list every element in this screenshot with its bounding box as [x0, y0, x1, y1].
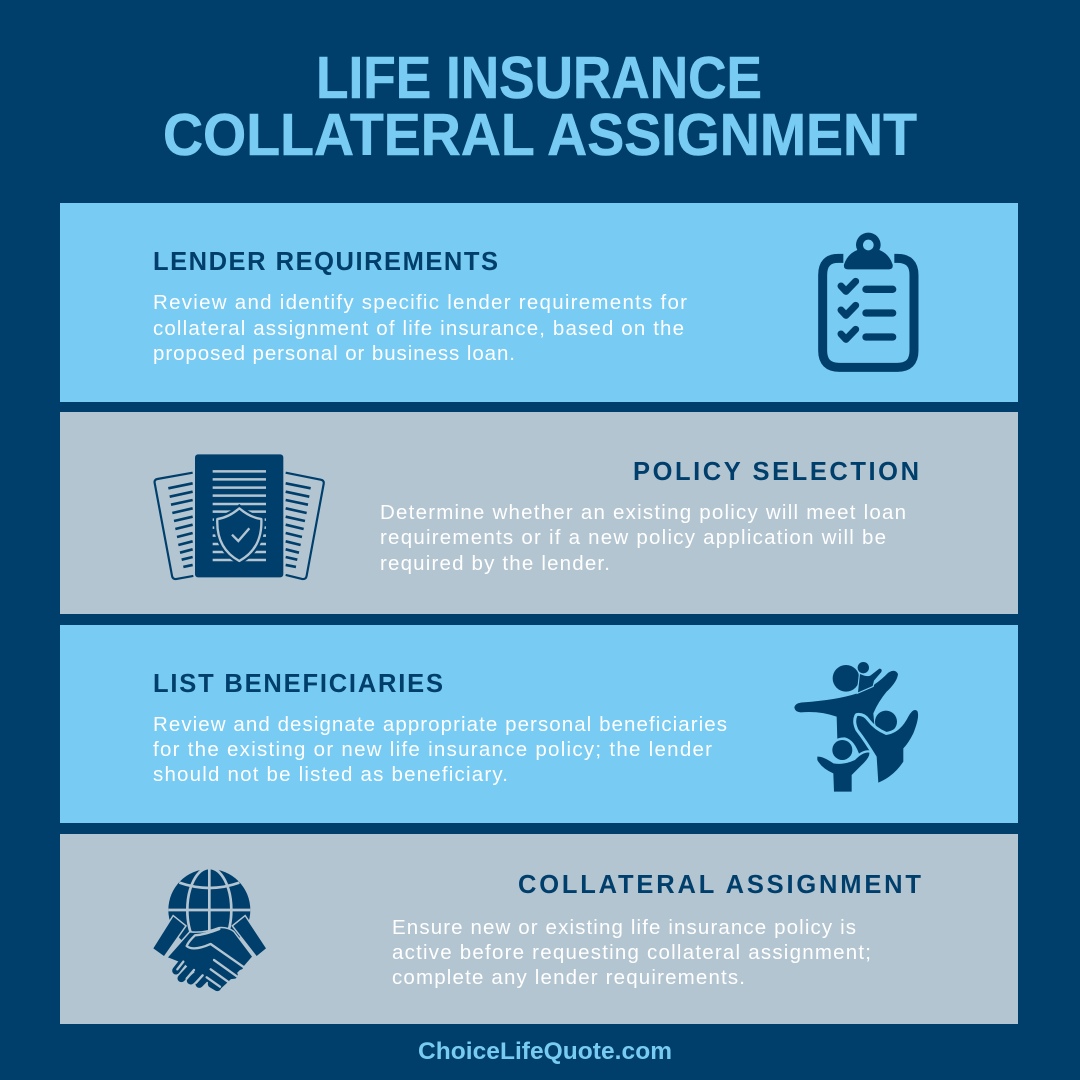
icon: documents with shield	[155, 454, 324, 579]
panel: policy selection	[60, 412, 1018, 614]
heading: collateral assignment: COLLATERAL ASSIGNMENT	[518, 871, 921, 899]
heading: list beneficiaries: LIST BENEFICIARIES	[153, 670, 443, 698]
title	[163, 45, 917, 168]
text block: collateral assignment: active before requesting collateral assignment;	[392, 941, 871, 964]
heading: lender requirements: LENDER REQUIREMENTS	[153, 248, 498, 276]
text block: list beneficiaries: Review and designate appropriate personal beneficiaries	[153, 713, 727, 736]
panel: lender requirements	[60, 203, 1018, 402]
title: LIFE INSURANCE	[316, 45, 762, 111]
text block: lender requirements: proposed personal or business loan.	[153, 342, 515, 365]
footer: website: ChoiceLifeQuote.com	[418, 1038, 672, 1065]
panel: list beneficiaries	[60, 625, 1018, 823]
text block: policy selection: required by the lender.	[380, 552, 610, 575]
text block: list beneficiaries: for the existing or new life insurance policy; the lender	[153, 738, 712, 761]
text block: policy selection	[380, 501, 906, 575]
text block: collateral assignment	[392, 916, 871, 989]
icon: clipboard checklist	[823, 233, 914, 367]
text block: list beneficiaries	[153, 713, 727, 786]
text block: lender requirements	[153, 291, 687, 365]
text block: collateral assignment: complete any lender requirements.	[392, 966, 745, 989]
text block: lender requirements: collateral assignment of life insurance, based on the	[153, 317, 684, 340]
text block: policy selection: requirements or if a new policy application will be	[380, 526, 886, 549]
icon: globe and handshake	[153, 868, 266, 989]
text block: list beneficiaries: should not be listed as beneficiary.	[153, 763, 508, 786]
panel: collateral assignment	[60, 834, 1018, 1024]
heading: policy selection: POLICY SELECTION	[633, 458, 919, 486]
text block: collateral assignment: Ensure new or existing life insurance policy is	[392, 916, 856, 939]
text block: lender requirements: Review and identify specific lender requirements for	[153, 291, 687, 314]
icon: family	[794, 662, 918, 792]
title: COLLATERAL ASSIGNMENT	[163, 102, 917, 168]
text block: policy selection: Determine whether an existing policy will meet loan	[380, 501, 906, 524]
